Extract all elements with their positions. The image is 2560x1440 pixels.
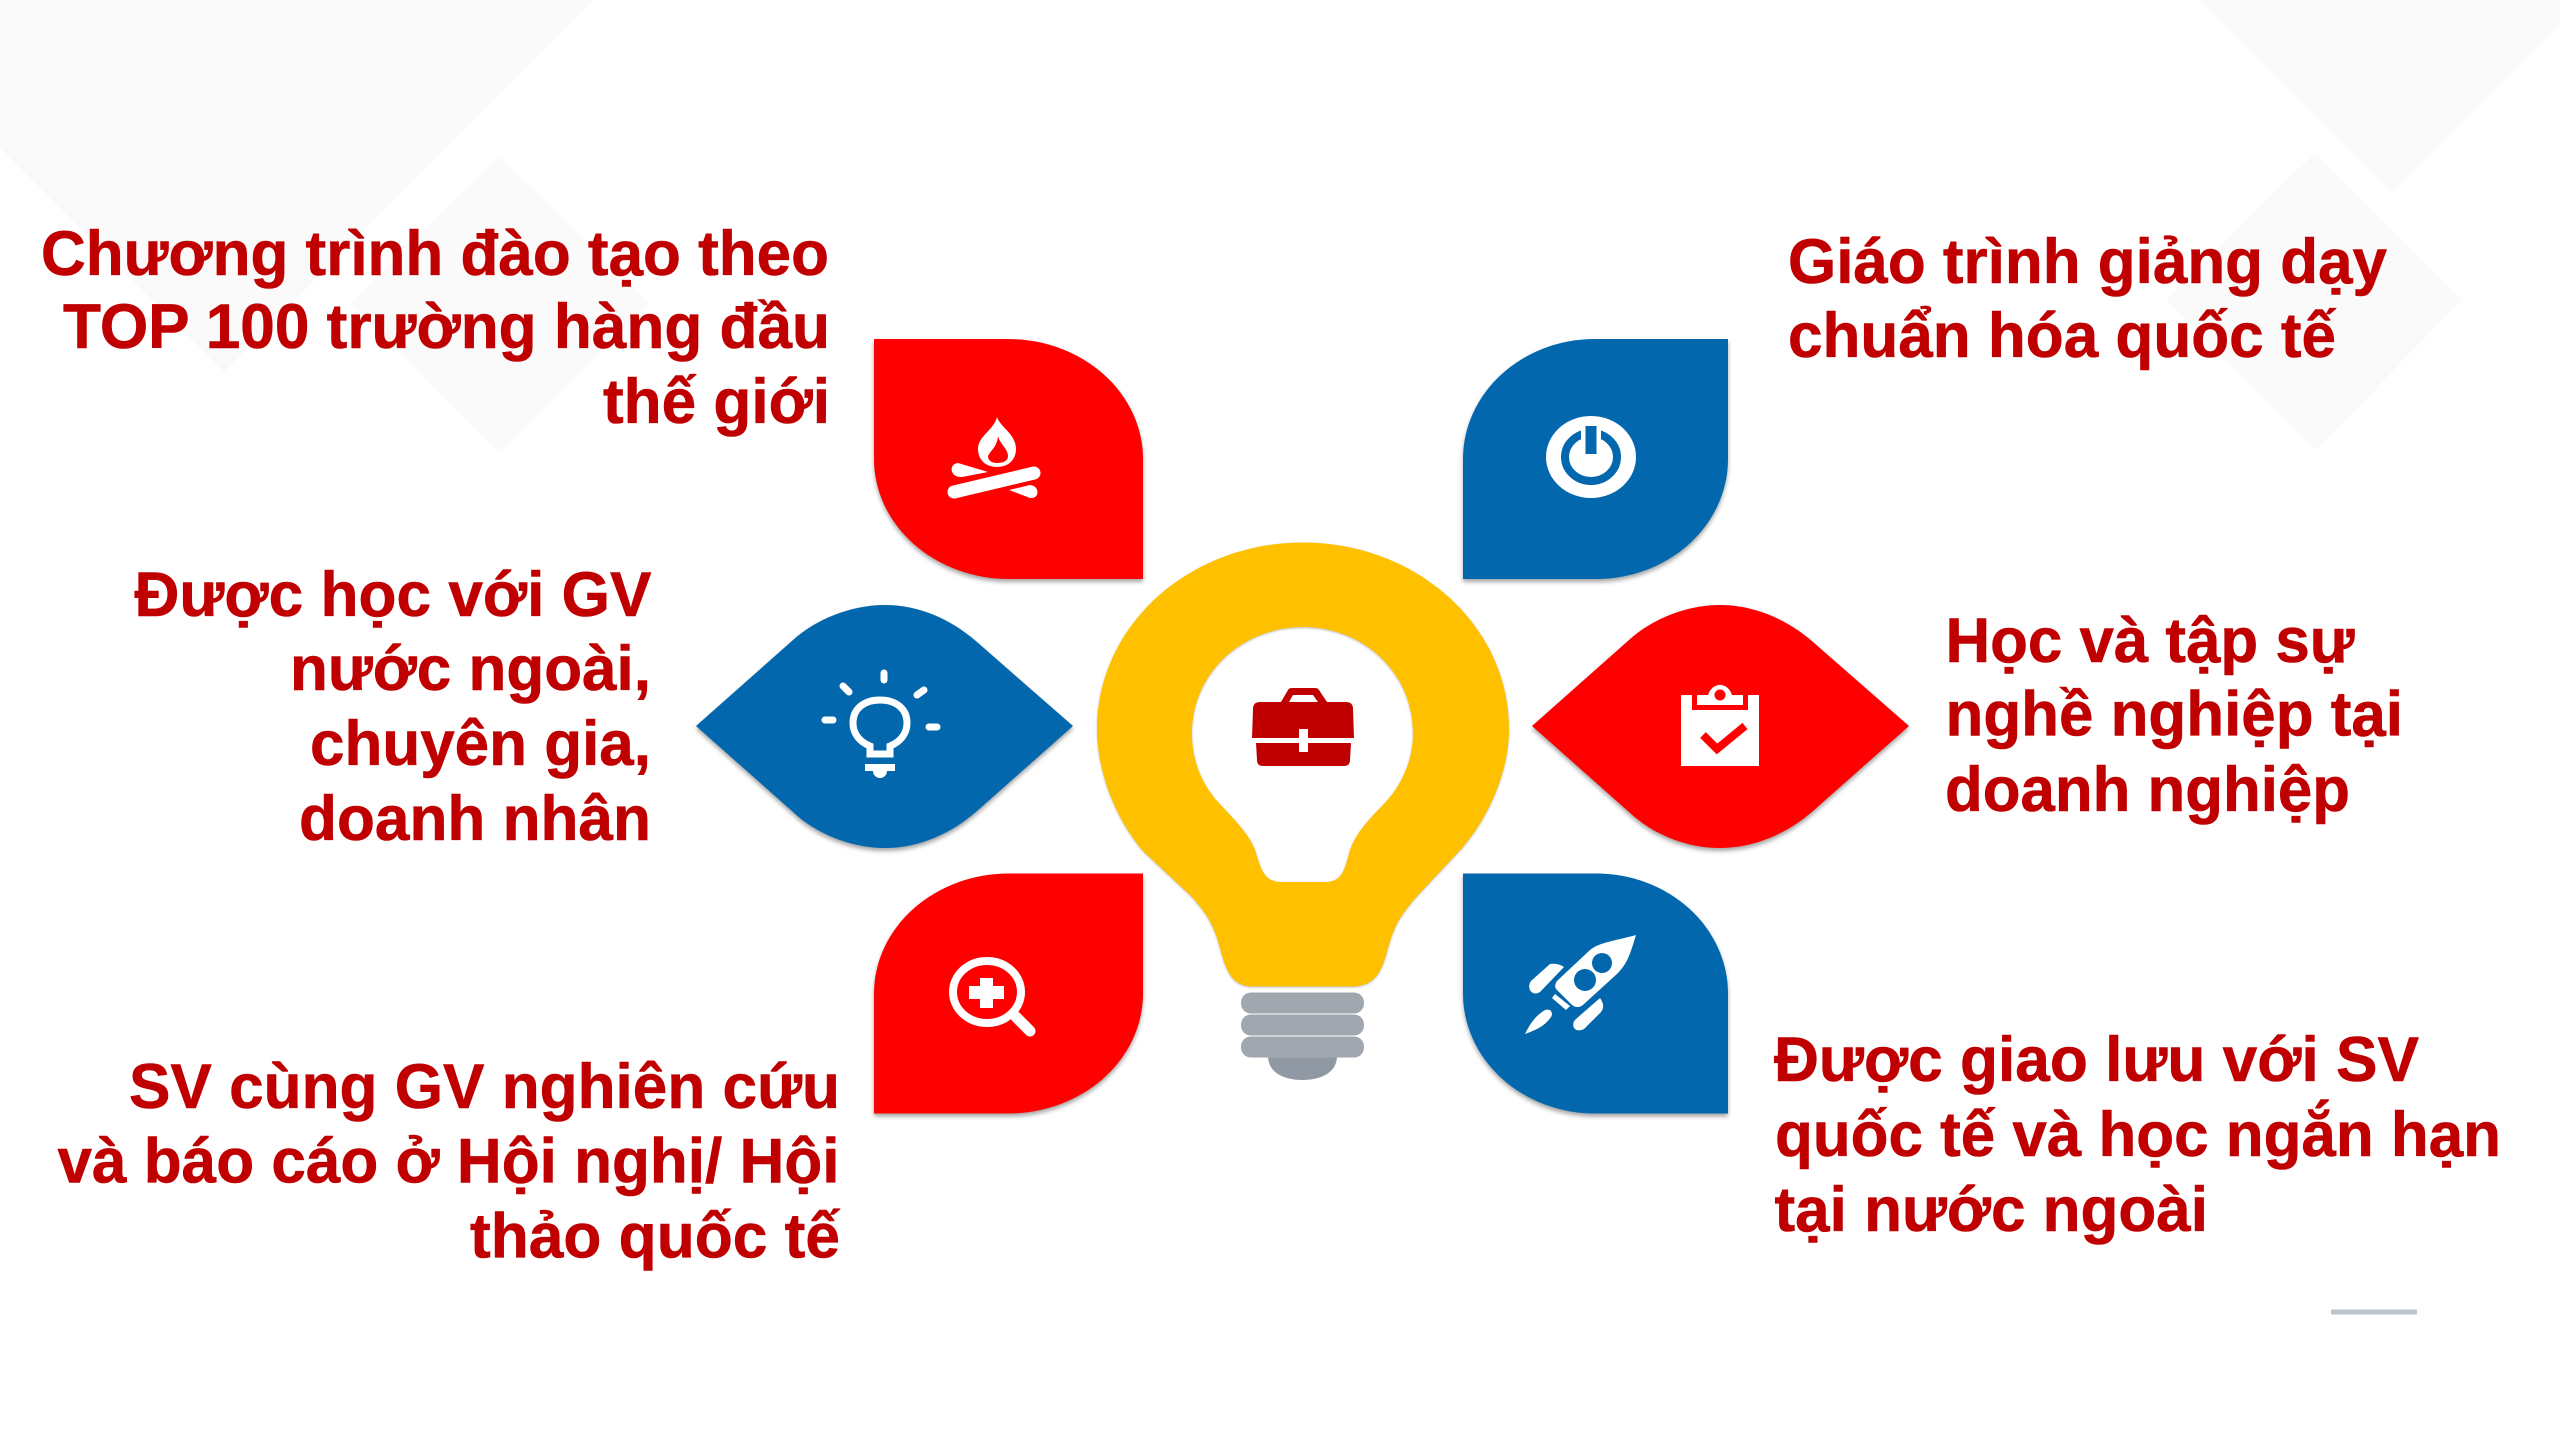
text: bottom-left research [58, 1052, 841, 1272]
text: middle-right internship: Học và tập sự [1946, 606, 2355, 676]
text: bottom-right exchange: Được giao lưu với SV [1774, 1025, 2419, 1095]
icon: rocket [1525, 935, 1636, 1034]
text: middle-left lecturers: Được học với GV [134, 560, 652, 630]
petal: middle-right red with clipboard icon [1532, 605, 1909, 848]
icon: magnifier plus [953, 961, 1030, 1031]
icon: toolbox [1252, 688, 1354, 766]
petal: bottom-left red with magnifier icon [874, 874, 1143, 1114]
icon: power [1546, 416, 1636, 498]
text: bottom-right exchange: quốc tế và học ngắn hạn [1775, 1099, 2501, 1170]
bulb glass [1097, 542, 1509, 986]
text: middle-left lecturers [134, 560, 652, 854]
petal: top-right blue with power icon [1463, 339, 1728, 579]
petal: top-left red with campfire icon [874, 339, 1143, 579]
text: top-right curriculum: Giáo trình giảng dạy [1788, 227, 2387, 297]
text: bottom-right exchange [1774, 1025, 2501, 1245]
petal: bottom-right blue with rocket icon [1463, 874, 1728, 1114]
text: top-left programme: Chương trình đào tạo theo [41, 219, 829, 289]
text: middle-right internship [1945, 606, 2403, 825]
text: top-left programme: thế giới [603, 367, 830, 437]
text: top-left programme [41, 219, 830, 437]
text: middle-left lecturers: doanh nhân [299, 784, 651, 854]
text: top-right curriculum [1788, 227, 2387, 371]
text: middle-right internship: doanh nghiệp [1945, 755, 2350, 825]
text: bottom-left research: và báo cáo ở Hội nghị/ Hội [58, 1126, 840, 1196]
footer bar [2331, 1310, 2417, 1314]
bulb screw base [1241, 992, 1364, 1080]
petal: middle-left blue with lightbulb icon [696, 605, 1073, 848]
icon: campfire [952, 417, 1038, 498]
central lightbulb [1097, 542, 1509, 1080]
text: bottom-left research: SV cùng GV nghiên cứu [129, 1052, 840, 1122]
icon: clipboard [1681, 685, 1759, 766]
text: bottom-left research: thảo quốc tế [470, 1202, 841, 1272]
text: top-right curriculum: chuẩn hóa quốc tế [1788, 301, 2337, 371]
icon: lightbulb [825, 673, 937, 778]
text: middle-left lecturers: chuyên gia, [310, 709, 651, 779]
text: middle-right internship: nghề nghiệp tại [1946, 680, 2403, 750]
text: top-left programme: TOP 100 trường hàng đầu [63, 292, 830, 362]
text: middle-left lecturers: nước ngoài, [290, 634, 651, 704]
text: bottom-right exchange: tại nước ngoài [1774, 1175, 2208, 1245]
